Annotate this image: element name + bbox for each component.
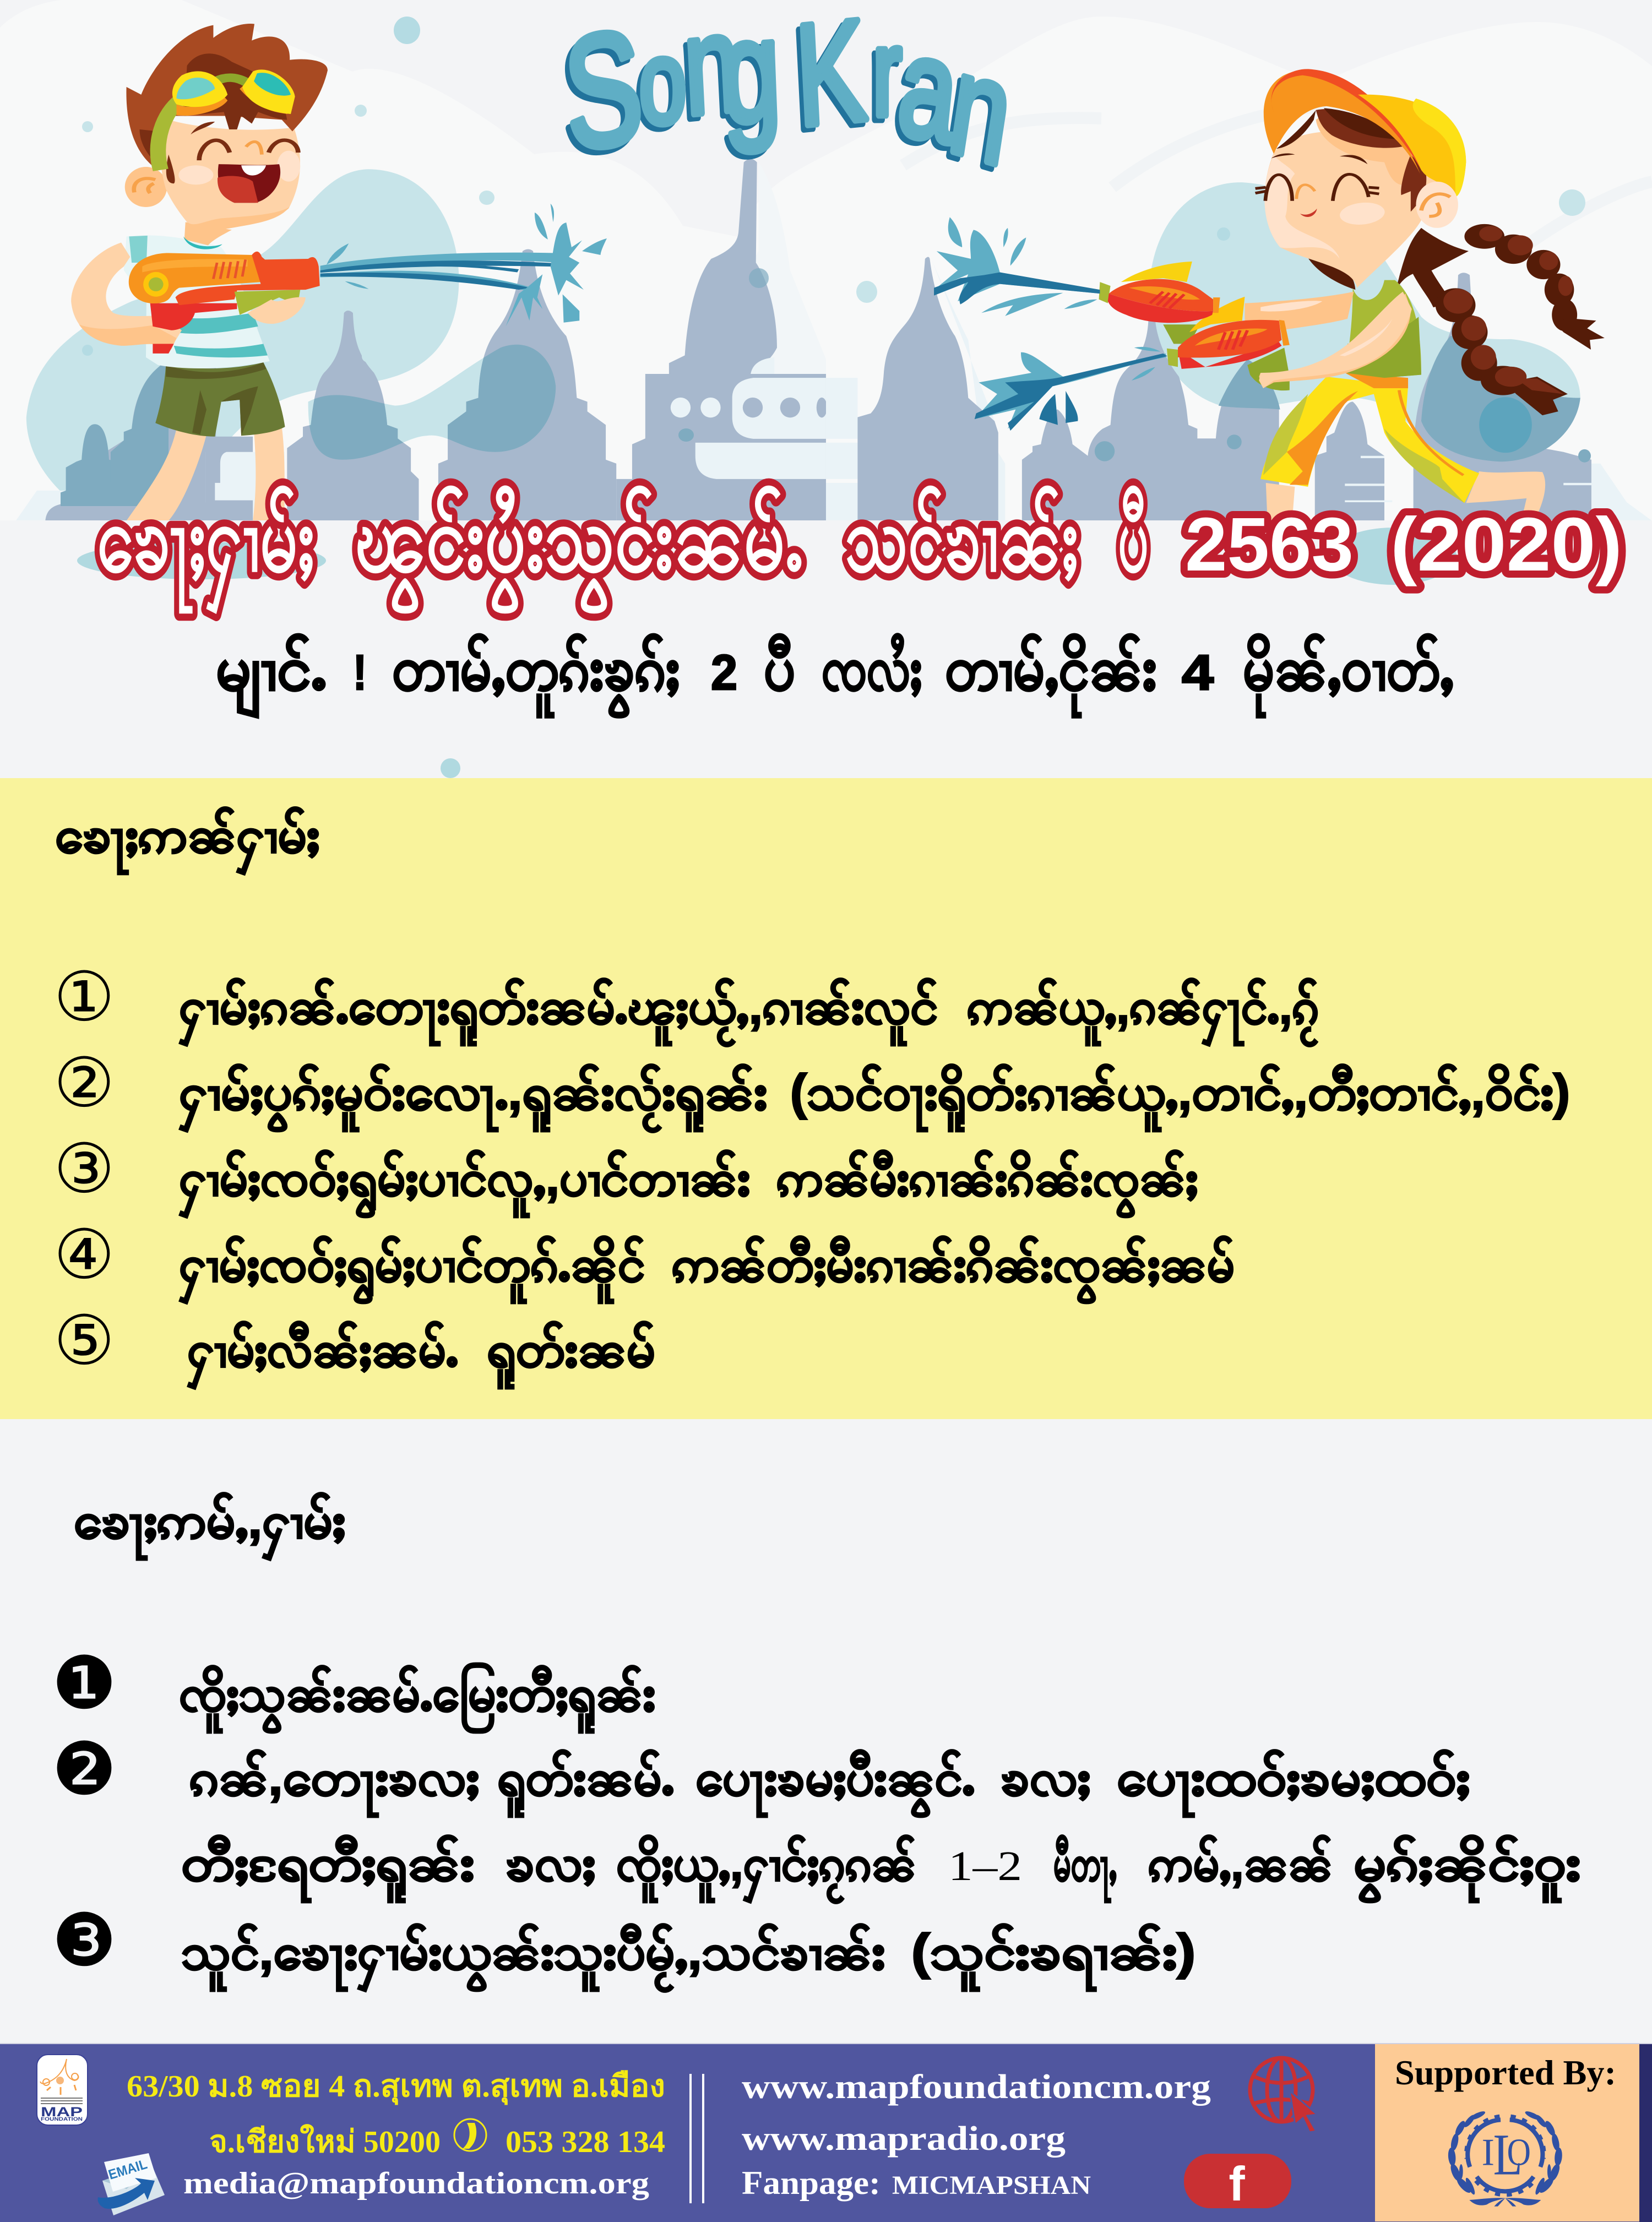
list item 1 [53,958,1319,1047]
girl with water guns [934,69,1605,521]
list item 2: ၵၼ်,တေႃးၶလႈ [189,1750,479,1817]
temple silhouettes left [16,159,827,521]
list item 5 [53,1301,655,1389]
list item 1: ① [53,958,115,1037]
title blobs behind heading [77,528,1457,778]
icon: phone [454,2119,486,2151]
heading: Songkran warnings title: ပီ [1118,485,1149,591]
subtitle: penalty warning [216,634,1454,718]
ILO logo: L [1493,2122,1523,2187]
website links: www.mapfoundationcm.org [742,2068,1211,2106]
list item 3 [53,1129,1198,1218]
email address: media@mapfoundationcm.org [183,2166,649,2201]
heading: Songkran warnings title [97,485,1622,615]
list item 3: ဢၼ်မီးၵၢၼ်းၵိၼ်းၸွၼ်ႈ [776,1150,1198,1218]
list item 2: ပေႃးထဝ်ႈၶမႈထဝ်ႈ [1117,1750,1470,1817]
list item 2: 1–2 [948,1843,1022,1889]
ILO logo [1448,2110,1563,2207]
subtitle: penalty warning: ၸလႆႈ [822,634,922,703]
heading: Songkran warnings title: သင်ၶၢၼ်ႈ [845,485,1078,591]
icon: Facebook: f [1229,2156,1245,2211]
subtitle: penalty warning: တၢမ်ႇငိုၼ်း [945,634,1156,718]
website links: Fanpage: [742,2165,881,2201]
water droplets [82,17,1585,442]
logo text: SongKran: o [639,15,687,148]
panel: prohibited acts [0,778,1652,1419]
heading: Songkran warnings title: 2563 [1185,502,1354,587]
list item 3: (သူင်းၶရၢၼ်း) [911,1924,1195,1991]
address: 053 328 134 [506,2125,665,2159]
list item 2: ၸိူႈယူႇ,ႁၢင်ႈၵႂၵၼ် [616,1835,916,1904]
logo text: SongKran: r [872,3,902,142]
list item 2: ❷ [52,1727,117,1812]
list item 2: ဢမ်ႇ,ၼၼ် [1148,1835,1333,1891]
braids [1421,224,1605,415]
logo text: SongKran: S [558,0,648,184]
heading: Songkran warnings title: (2020) [1390,502,1622,587]
teal background blobs [26,169,1580,521]
list item 1: ႁၢမ်ႈၵၼ်ႉတေႃးရူတ်းၼမ်ႉၽူႈယႂ်ႇ,ၵၢၼ်းလူင် [179,979,938,1047]
logo text: SongKran [554,0,1021,200]
heading: Songkran warnings title: ၶေႃႈႁၢမ်ႈ [97,485,314,615]
list item 2: ၶလႈ [506,1836,595,1891]
logo text: SongKran: S [554,0,644,189]
list item 5: ⑤ [53,1301,115,1381]
panel: supported by [1375,2044,1652,2222]
logo text: SongKran: o [635,20,683,153]
heading: Songkran warnings title: ၽွင်းပွႆးသွင်းၼမ်ႉ [355,485,803,613]
list item 3: သူင်,ၶေႃးႁၢမ်းယွၼ်းသူးပီမႂ်ႇ,သင်ၶၢၼ်း [181,1924,885,1992]
list item 3: ❸ [52,1898,117,1983]
temple silhouettes right [826,257,1652,521]
subtitle: penalty warning: 2 [711,645,737,700]
panels on central temple [695,357,826,479]
illustration: Songkran festival scene [0,0,1652,521]
heading: prohibited acts: ၶေႃႈဢၼ်ႁၢမ်ႈ [55,807,319,874]
list item 1: ဢၼ်ယူႇ,ၵၼ်ႁႃင်ႉ,ၵႂ် [967,979,1319,1047]
list item 2: မွၵ်ႈၼိုင်ႈဝူး [1354,1835,1580,1903]
list item 1: ၸိူႈသွၼ်းၼမ်ႉမြေးတီႈရူၼ်း [179,1664,655,1733]
list item 3: ③ [53,1129,115,1209]
list item 4 [53,1215,1235,1303]
list item 2 [52,1727,1580,1904]
address: 63/30 ม.8 ซอย 4 ถ.สุเทพ ต.สุเทพ อ.เมือง [127,2069,665,2105]
list item 2: ပေႃးၶမႈပီးၼွင်ႉ [695,1750,975,1817]
logo text: SongKran: r [868,8,898,146]
logo text: SongKran: a [892,4,965,174]
subtitle: penalty warning: ! [353,645,367,700]
list item 2: ၶလႈ [1001,1751,1090,1806]
footer bar [0,2043,1652,2222]
logo text: SongKran: n [937,26,1018,200]
icon: email envelope [98,2153,165,2215]
label: supported by: Supported By: [1395,2053,1616,2092]
background clouds [0,0,1652,520]
list item 2 [53,1044,1570,1133]
website links [742,2068,1211,2201]
list item 2: မီတႃႇ [1053,1835,1117,1903]
website links: MICMAPSHAN [892,2171,1091,2200]
icon: Facebook [1184,2154,1291,2211]
boy with water gun [71,24,607,521]
list item 4: ဢၼ်တီႈမီးၵၢၼ်းၵိၼ်းၸွၼ်ႈၼမ် [672,1236,1235,1303]
list item 5: ႁၢမ်ႈလီၼ်ႈၼမ်ႉ [187,1322,458,1389]
logo text: SongKran: n [941,22,1021,196]
subtitle: penalty warning: မျၢင်ႉ [216,634,327,718]
subtitle: penalty warning: မိုၼ်ႇဝၢတ်ႇ [1243,634,1454,718]
MAP Foundation logo: FOUNDATION [41,2116,83,2122]
subtitle: penalty warning: တၢမ်ႇတူၵ်းၶွၵ်ႈ [392,634,680,718]
list item 1: ❶ [52,1641,117,1726]
MAP Foundation logo [37,2055,88,2125]
logo text: SongKran: a [888,9,961,178]
ILO logo: I [1482,2132,1495,2174]
heading: recommended acts: ၶေႃႈဢမ်ႇ,ႁၢမ်ႈ [74,1493,345,1560]
icon: globe with cursor [1250,2058,1317,2132]
panel: recommended acts [52,1493,1580,1992]
list item 2: ႁၢမ်ႈပွၵ်ႈမူဝ်းလေႃႉ,ရူၼ်းလႂ်းရူၼ်း [179,1064,767,1133]
subtitle: penalty warning: 4 [1182,645,1214,700]
address: จ.เชียงใหม่ 50200 [209,2123,441,2159]
divider [691,2074,703,2203]
website links: www.mapradio.org [742,2120,1066,2158]
MAP Foundation logo: MAP [41,2105,83,2120]
list item 2: ② [53,1044,115,1123]
list item 1 [52,1641,655,1733]
list item 3 [52,1898,1195,1992]
list item 2: (သင်ဝႃးရိူတ်းၵၢၼ်ယူႇ,တၢင်ႇ,တီႈတၢင်ႇ,ဝိင်း) [790,1064,1570,1132]
list item 4: ႁၢမ်ႈၸဝ်ႈရွမ်ႈပၢင်တူၵ်ႉၼိူင် [179,1236,645,1303]
list item 4: ④ [53,1215,115,1295]
subtitle: penalty warning: ပီ [764,634,795,703]
list item 2: ရူတ်းၼမ်ႉ [497,1750,674,1817]
ILO logo: O [1507,2132,1531,2174]
icon: email envelope: EMAIL [107,2156,149,2183]
address [127,2069,665,2159]
list item 5: ရူတ်းၼမ် [487,1322,655,1389]
list item 3: ႁၢမ်ႈၸဝ်ႈရွမ်ႈပၢင်လူႇ,ပၢင်တၢၼ်း [179,1150,750,1218]
list item 2: တီႈရႄတီႈရူၼ်း [181,1835,474,1903]
